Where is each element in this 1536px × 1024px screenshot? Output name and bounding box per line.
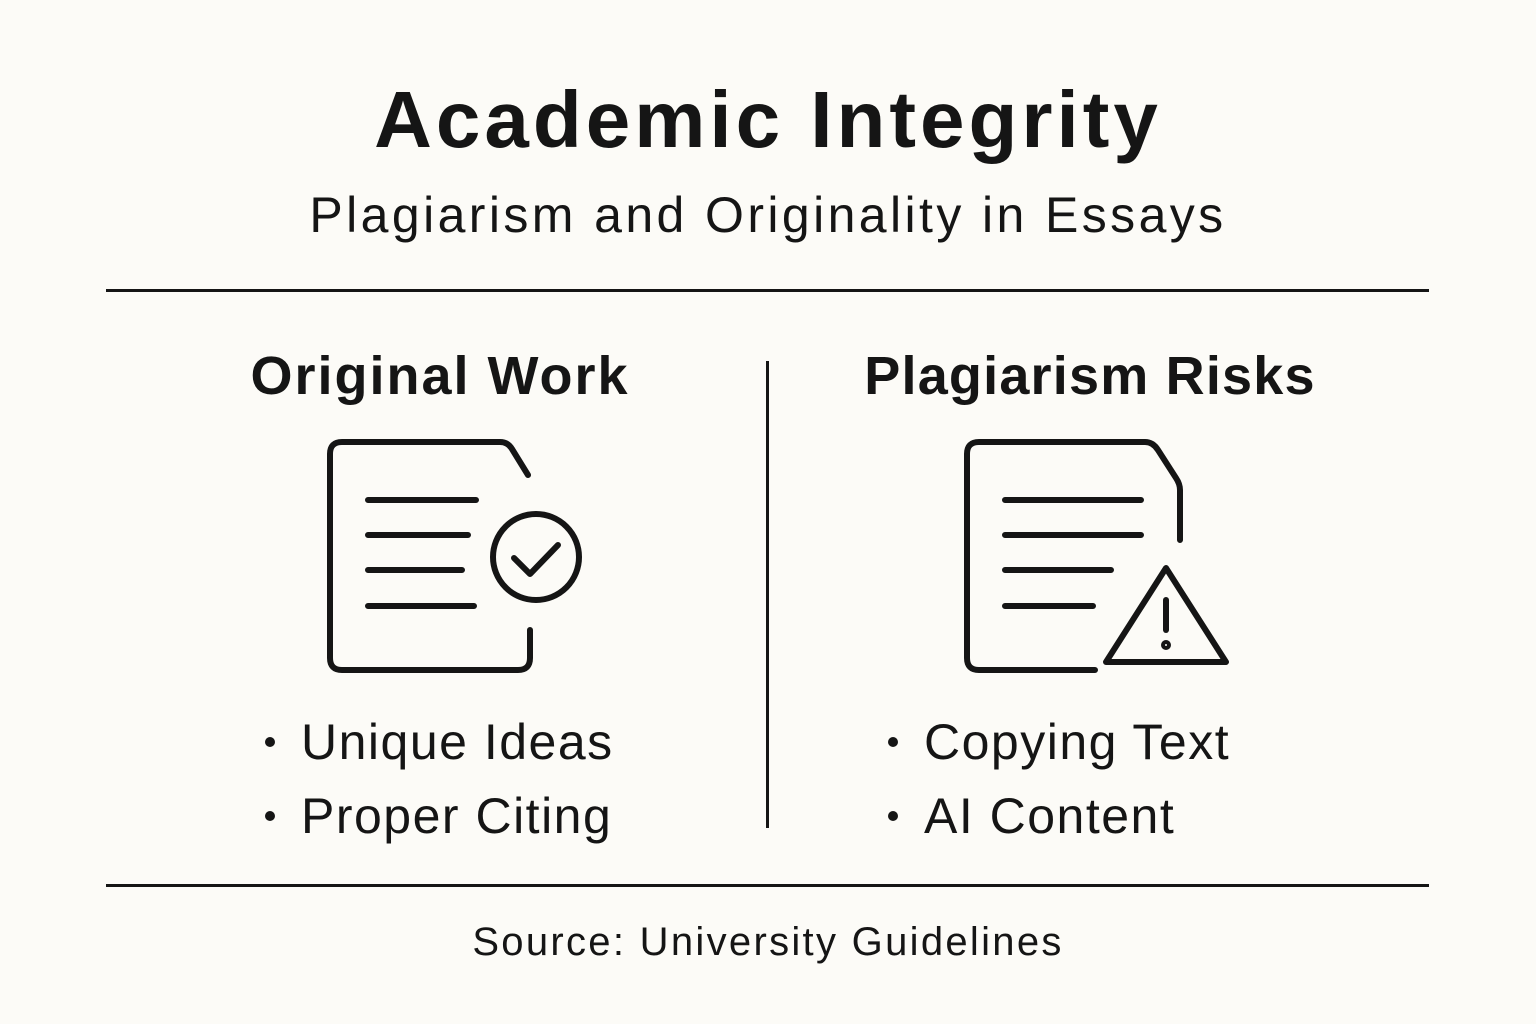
bullets <box>265 714 614 844</box>
heading: original work: Original Work <box>250 346 630 406</box>
subtitle: Plagiarism and Originality in Essays <box>309 187 1227 243</box>
panel: original work <box>250 346 630 844</box>
icon: document with warning <box>964 439 1229 673</box>
heading: plagiarism risks: Plagiarism Risks <box>864 346 1316 406</box>
icon: document with check <box>327 439 582 673</box>
bullets: Unique Ideas <box>301 714 614 770</box>
panel: plagiarism risks <box>864 346 1316 844</box>
title: Academic Integrity <box>374 75 1162 164</box>
bullets <box>888 714 1230 844</box>
bullets: Copying Text <box>924 714 1230 770</box>
source: Source: University Guidelines <box>472 920 1064 964</box>
bullets: AI Content <box>924 788 1175 844</box>
bullets: Proper Citing <box>301 788 612 844</box>
